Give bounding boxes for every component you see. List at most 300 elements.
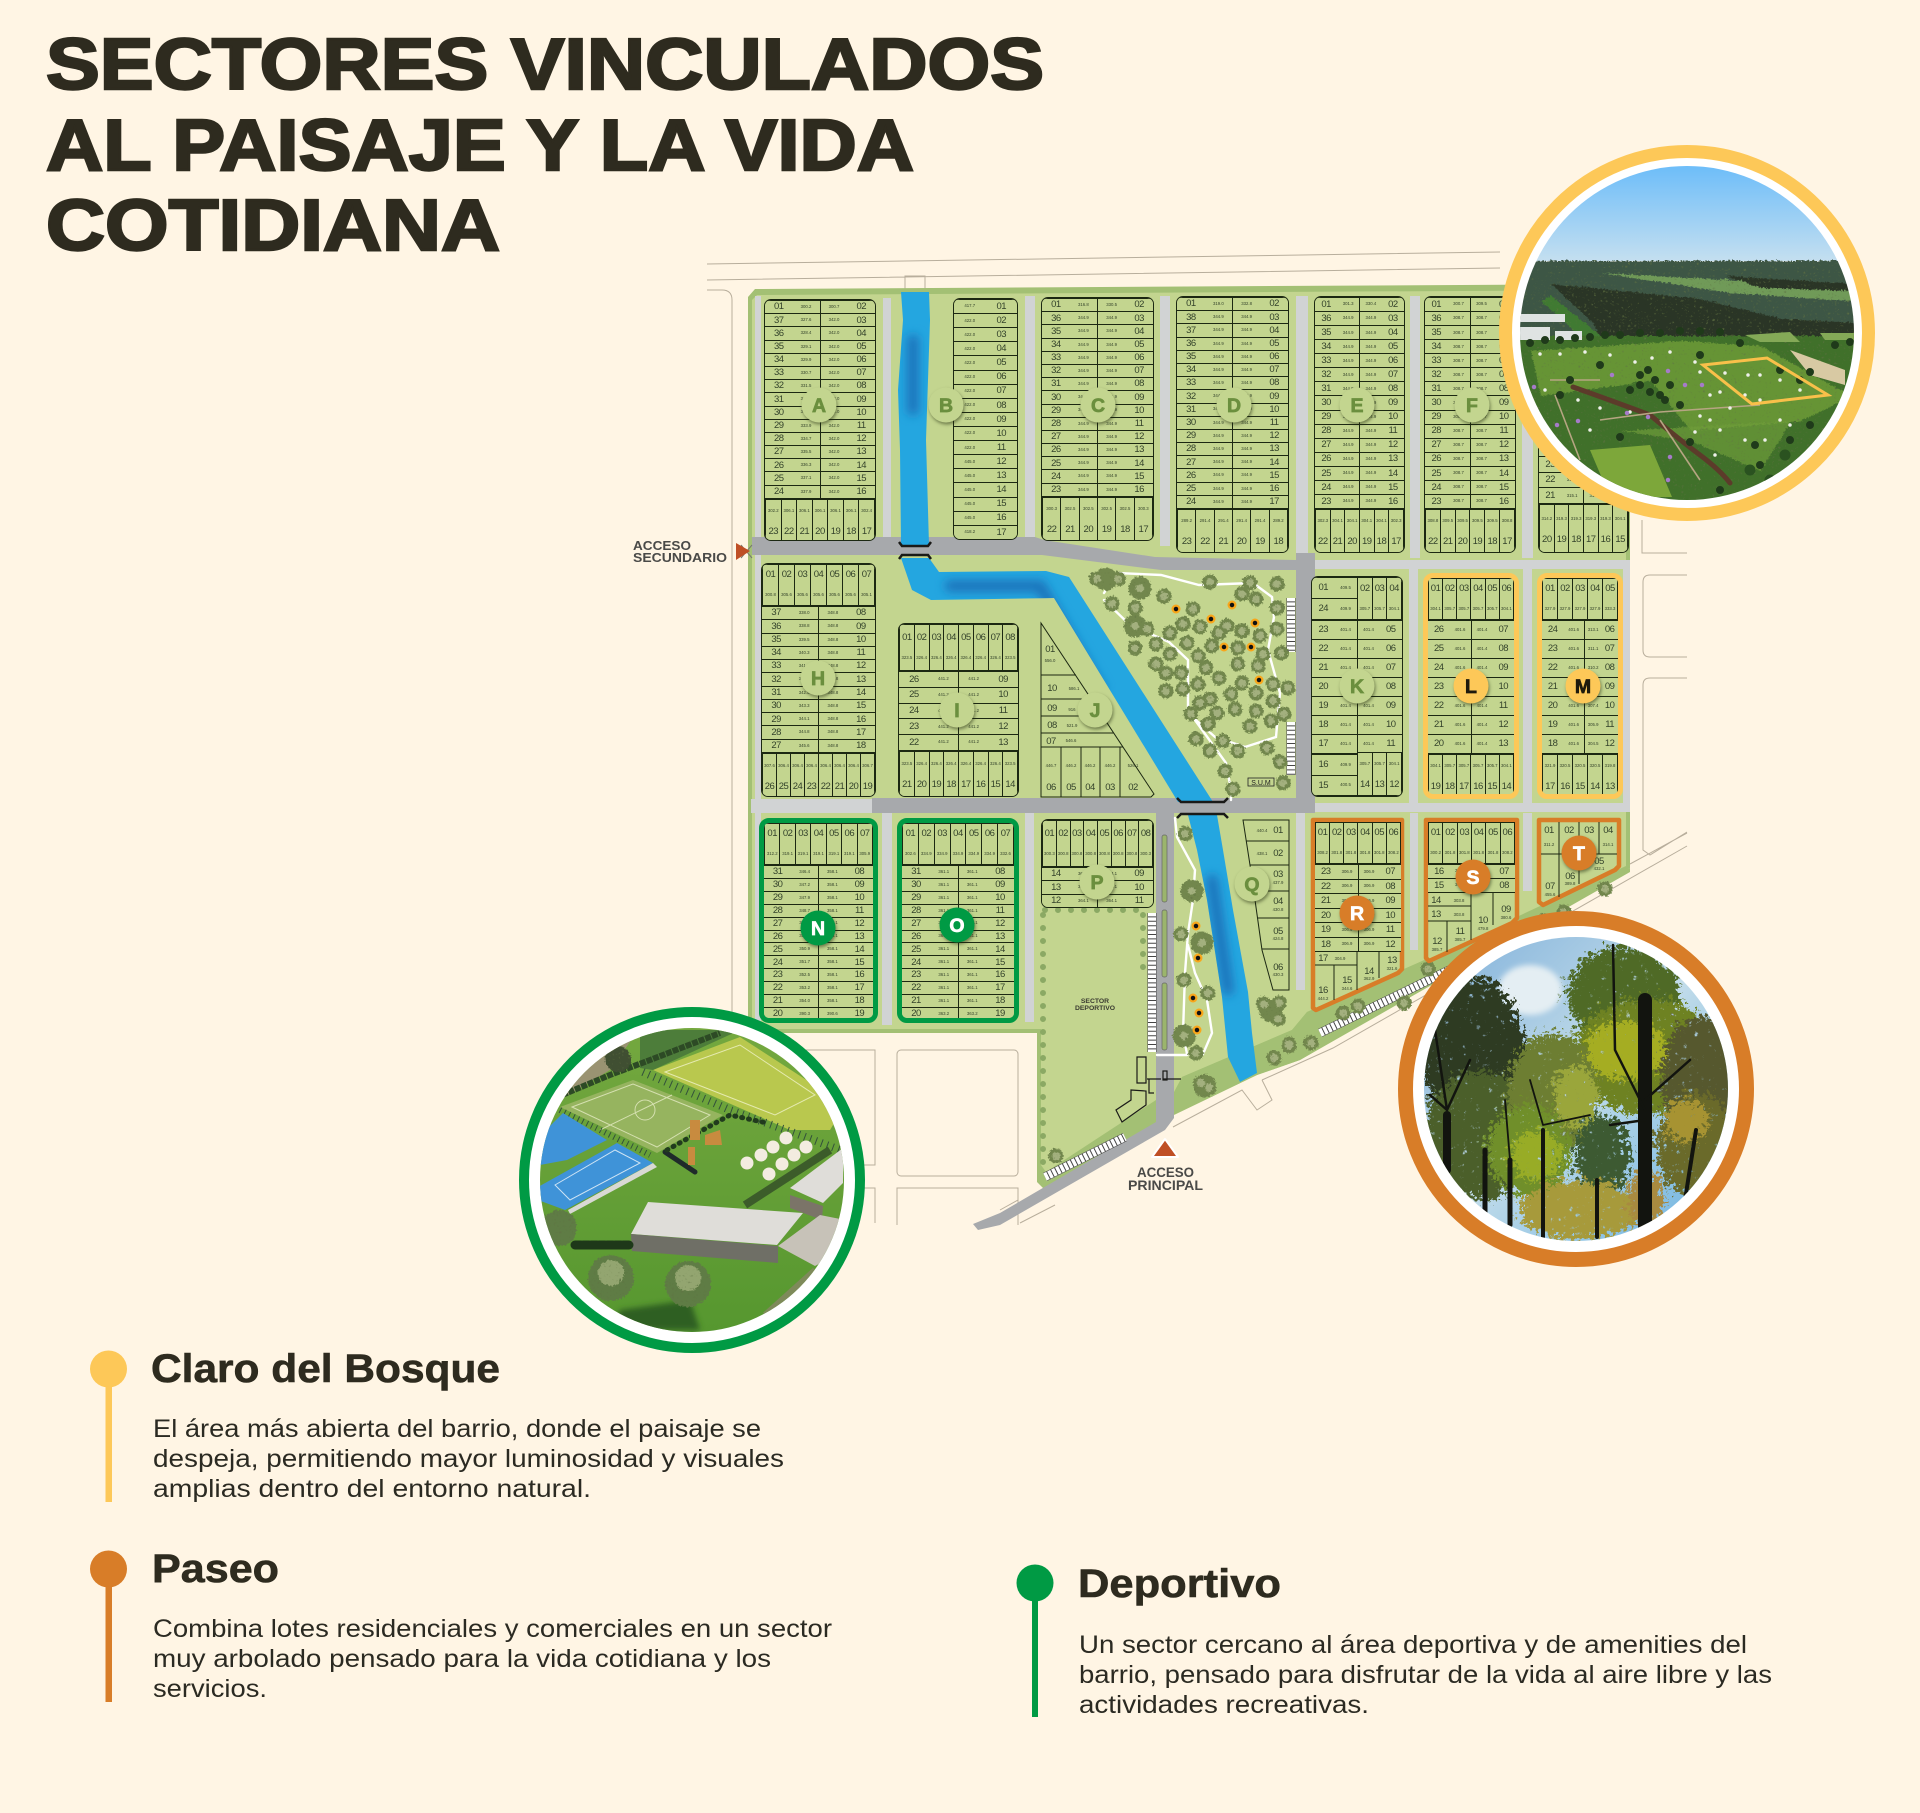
sector O: Deportivo lots: 25: [911, 944, 921, 955]
block B lots: 12: [996, 456, 1006, 467]
sector M: Claro del Bosque lots: 04: [1590, 583, 1600, 594]
block F lots: 308.8: [1502, 518, 1512, 523]
icon: green pin: [1016, 1564, 1054, 1717]
block H lots: 338.8: [799, 623, 810, 628]
block I lots: 02: [917, 632, 926, 642]
sector N: Deportivo lots: 350.9: [799, 946, 810, 951]
sector M: Claro del Bosque lots: 11: [1605, 719, 1614, 730]
block J lots: 08: [1047, 720, 1057, 731]
block A lots: 331.5: [801, 383, 811, 388]
block A lots: 05: [856, 341, 866, 352]
park lawn paths and hedges: [1043, 573, 1280, 1167]
sector N: Deportivo lots: 358.1: [827, 972, 838, 977]
block C lots: 35: [1051, 326, 1061, 337]
sector badges: I: [954, 700, 960, 722]
sector O: Deportivo lots: 27: [911, 918, 921, 929]
block K lots: 305.7: [1359, 606, 1370, 610]
block H lots: 306.4: [820, 763, 831, 768]
sector O: Deportivo lots: 01: [906, 828, 915, 839]
sector M: Claro del Bosque lots: 15: [1575, 781, 1585, 792]
block G lots: 12: [1612, 490, 1622, 501]
sector N: Deportivo lots: 312.2: [767, 851, 778, 856]
block E lots: 15: [1388, 482, 1398, 493]
block F lots: 308.7: [1476, 456, 1487, 461]
block D lots: 36: [1186, 338, 1196, 349]
sector N: Deportivo lots: 349.5: [799, 920, 810, 925]
block J lots: 04: [1085, 782, 1095, 793]
block G lots: 14: [1612, 459, 1622, 470]
block K lots: 20: [1318, 681, 1328, 692]
photo: sports amenities, green ring: [524, 1012, 860, 1348]
block H lots: 04: [814, 569, 823, 580]
block H lots: 15: [856, 700, 866, 711]
block E lots: 29: [1321, 411, 1331, 422]
block A lots: 333.9: [801, 423, 811, 428]
block D lots: 07: [1269, 364, 1279, 375]
block D lots: 344.9: [1213, 420, 1224, 425]
sector O: Deportivo lots: 13: [995, 931, 1005, 942]
block F lots: 300.7: [1453, 301, 1464, 306]
block I lots: 25: [909, 689, 919, 700]
block A lots: 02: [856, 301, 866, 312]
sector L: Claro del Bosque lots: 305.7: [1473, 763, 1483, 768]
block H lots: 17: [856, 727, 866, 738]
block Q lots: 02: [1273, 848, 1283, 859]
block F lots: 34: [1431, 341, 1441, 352]
block K lots: 409.5: [1340, 585, 1351, 590]
block C lots: 32: [1051, 365, 1061, 376]
block F lots: 308.7: [1453, 315, 1464, 320]
block D lots: 05: [1269, 338, 1279, 349]
icon: yellow pin: [90, 1350, 127, 1502]
block G lots: 319.3: [1585, 516, 1596, 520]
block A lots: 11: [857, 420, 866, 431]
block C lots: 34: [1051, 339, 1061, 350]
S.U.M building: S.U.M: [1251, 780, 1271, 787]
sector O: Deportivo lots: 361.1: [938, 869, 949, 874]
block I lots: 326.4: [916, 654, 927, 660]
sector L: Claro del Bosque lots: 25: [1434, 643, 1444, 654]
sector L: Claro del Bosque lots: 08: [1498, 643, 1508, 654]
sector R upper lots: 306.9: [1342, 869, 1352, 874]
sector O: Deportivo lots: 11: [996, 905, 1004, 916]
block K lots: 409.9: [1340, 606, 1351, 611]
block F lots: 32: [1431, 369, 1441, 380]
block E lots: 344.9: [1365, 484, 1376, 489]
block C lots: 04: [1134, 326, 1144, 337]
block H lots: 348.8: [827, 623, 838, 628]
block C lots: 302.5: [1120, 506, 1130, 511]
block D lots: 289.2: [1273, 518, 1284, 523]
block F lots: 29: [1431, 411, 1441, 422]
block H lots: 25: [779, 781, 788, 792]
block F lots: 308.8: [1428, 518, 1438, 523]
block H lots: 305.6: [797, 592, 808, 597]
sector S upper lots: 03: [1460, 827, 1469, 838]
block H lots: 348.8: [827, 743, 838, 748]
block D lots: 344.9: [1241, 446, 1252, 451]
block F lots: 22: [1428, 536, 1438, 547]
block C lots: 344.9: [1078, 460, 1089, 465]
block A lots: 342.0: [829, 330, 839, 335]
block D lots: 26: [1186, 470, 1196, 481]
sector N: Deportivo lots: 16: [855, 969, 864, 980]
sector L: Claro del Bosque lots: 401.4: [1477, 703, 1487, 708]
sector M: Claro del Bosque lots: 06: [1605, 624, 1614, 635]
block A lots: 25: [774, 473, 784, 484]
block F lots: 02: [1499, 299, 1509, 310]
block C lots: 302.5: [1065, 506, 1075, 511]
legend: Paseo: servicios.: [153, 1675, 267, 1703]
block D lots: 30: [1186, 417, 1196, 428]
block A lots: 17: [862, 526, 871, 537]
block B lots: 417.7: [964, 303, 975, 308]
sector R upper lots: 09: [1385, 895, 1395, 906]
block G lots: 22: [1545, 474, 1555, 485]
sector M: Claro del Bosque lots: 12: [1605, 738, 1614, 749]
sector L: Claro del Bosque lots: 20: [1434, 738, 1444, 749]
sector M: Claro del Bosque lots: 327.9: [1545, 606, 1555, 611]
block K lots: 305.7: [1374, 761, 1385, 766]
block A lots: 342.0: [829, 396, 839, 401]
block I lots: 26: [909, 674, 919, 685]
block P lots: 364.1: [1106, 871, 1117, 876]
block B lots: 422.0: [964, 374, 975, 379]
sector M: Claro del Bosque lots: 23: [1548, 643, 1557, 654]
sector L: Claro del Bosque lots: 305.7: [1444, 606, 1455, 611]
block E lots: 08: [1388, 383, 1398, 394]
block F lots: 308.7: [1453, 470, 1464, 475]
sector N: Deportivo lots: 348.7: [799, 908, 810, 913]
block B lots: 445.0: [964, 459, 975, 464]
sector O: Deportivo lots: 361.1: [967, 895, 978, 900]
sector N: Deportivo lots: 12: [855, 918, 864, 929]
block I lots: 20: [917, 779, 926, 790]
block A lots: 01: [774, 301, 784, 312]
block B lots: 445.0: [964, 501, 975, 506]
sector M: Claro del Bosque lots: 401.6: [1568, 627, 1579, 632]
block Q lots: 437.9: [1273, 880, 1284, 885]
block I lots: 17: [961, 779, 971, 790]
sector O: Deportivo lots: 361.1: [967, 920, 978, 925]
block I lots: 19: [932, 779, 941, 790]
block I lots: 326.4: [960, 761, 971, 766]
block D lots: 38: [1186, 312, 1196, 323]
block G lots: 315.1: [1589, 461, 1600, 466]
sector O: Deportivo lots: 334.9: [921, 851, 932, 856]
sector R outline and lower lots: 362.9: [1364, 976, 1375, 981]
sector L: Claro del Bosque lots: 304.1: [1501, 763, 1512, 768]
block B lots: 08: [996, 400, 1006, 411]
block D lots: 344.9: [1213, 459, 1224, 464]
block F lots: 308.7: [1453, 344, 1464, 349]
block F lots: 09: [1499, 397, 1509, 408]
block A lots: 16: [856, 486, 866, 497]
block E lots: 344.9: [1365, 456, 1376, 461]
block H lots: 34: [771, 647, 781, 658]
sector N: Deportivo lots: 358.1: [827, 869, 838, 874]
sector L: Claro del Bosque lots: 304.1: [1430, 763, 1441, 768]
S.U.M building: [1248, 778, 1274, 787]
surrounding parcel outlines: [707, 252, 1687, 1225]
sector S upper lots: 301.8: [1445, 850, 1455, 855]
sector badges: J: [1090, 700, 1100, 722]
sector N: Deportivo lots: 358.1: [827, 959, 838, 964]
sector O: Deportivo lots: 24: [911, 957, 921, 968]
block D lots: 21: [1219, 536, 1228, 547]
block B lots: 418.2: [964, 529, 975, 534]
block F lots: 308.7: [1453, 498, 1464, 503]
block B lots: 06: [996, 371, 1006, 382]
sector M: Claro del Bosque lots: 24: [1548, 624, 1557, 635]
legend: Claro del Bosque: Claro del Bosque: [151, 1347, 500, 1391]
block P lots: 08: [1141, 828, 1150, 838]
sector N: Deportivo lots: 358.1: [827, 882, 838, 887]
block P lots: 300.8: [1113, 850, 1124, 856]
block G lots: 304.1: [1615, 516, 1626, 520]
block E lots: 344.9: [1365, 330, 1376, 334]
block H lots: 339.5: [799, 637, 810, 642]
block C lots: 344.9: [1106, 355, 1117, 360]
block F lots: 308.7: [1453, 442, 1464, 447]
block A lots: 342.0: [829, 462, 839, 467]
sector M: Claro del Bosque lots: 401.6: [1568, 684, 1579, 689]
block E lots: 16: [1388, 496, 1398, 507]
legend: Deportivo: barrio, pensado para disfrutar de la vida al aire libre y las: [1079, 1661, 1772, 1689]
sector T outline and lots: 314.1: [1603, 842, 1614, 847]
main roads: [752, 537, 1315, 1230]
sector L: Claro del Bosque lots: 401.6: [1455, 665, 1465, 670]
block C lots: 13: [1134, 444, 1144, 455]
sector L: Claro del Bosque lots: 02: [1445, 583, 1455, 594]
sector S upper lots: 06: [1503, 827, 1512, 838]
block E lots: 35: [1321, 327, 1331, 338]
block J lots: 07: [1046, 736, 1056, 747]
block E lots: 19: [1362, 536, 1372, 547]
block B lots: 445.0: [964, 515, 975, 520]
block D lots: 344.9: [1213, 472, 1224, 477]
sector L: Claro del Bosque lots: 13: [1498, 738, 1508, 749]
block B lots: 13: [996, 470, 1006, 481]
block J lots: 06: [1046, 782, 1056, 793]
sector S outline and lower lots: 380.6: [1501, 915, 1512, 920]
block I lots: 441.2: [938, 724, 949, 729]
sector R upper lots: 306.9: [1342, 912, 1352, 917]
block I lots: 326.4: [946, 761, 956, 766]
sector S outline and lower lots: [1426, 820, 1517, 961]
block D lots: 344.9: [1241, 406, 1252, 411]
block F lots: 309.5: [1476, 301, 1487, 306]
block G lots: 21: [1545, 490, 1555, 501]
block H lots: 341.0: [799, 663, 810, 668]
sector O: Deportivo lots: 17: [995, 982, 1005, 993]
block F lots: 309.5: [1442, 518, 1453, 523]
sector R upper lots: 301.8: [1360, 850, 1370, 855]
sector M: Claro del Bosque lots: 311.1: [1588, 646, 1598, 651]
sector N: Deportivo lots: 06: [845, 828, 854, 839]
block F lots: 03: [1499, 313, 1509, 324]
block H lots: 348.8: [827, 663, 838, 668]
sector badges: L: [1465, 676, 1477, 698]
block I lots: 06: [976, 632, 985, 642]
block F lots: 308.7: [1476, 498, 1487, 503]
sector O: Deportivo lots: 16: [995, 969, 1005, 980]
block F lots: 20: [1458, 536, 1467, 547]
block C lots: 26: [1051, 444, 1061, 455]
sector N: Deportivo lots: 23: [773, 969, 782, 980]
block Q lots: 430.8: [1273, 907, 1284, 912]
block H lots: 19: [863, 781, 872, 792]
block D lots: 01: [1186, 298, 1196, 309]
block P lots: 364.1: [1078, 884, 1089, 889]
sector O: Deportivo lots: 361.1: [938, 895, 949, 900]
block C lots: 06: [1134, 352, 1144, 363]
block F lots: 01: [1431, 299, 1441, 310]
block D lots: 09: [1269, 391, 1279, 402]
sector R upper lots: 306.9: [1342, 927, 1352, 932]
sector O: Deportivo lots: 332.6: [1000, 851, 1011, 856]
sector S upper lots: 301.8: [1459, 850, 1470, 855]
sector L: Claro del Bosque lots: 04: [1473, 583, 1483, 594]
block F lots: 308.7: [1476, 386, 1487, 391]
block D lots: 28: [1186, 443, 1196, 454]
block C lots: 302.5: [1101, 506, 1112, 511]
block J lots: 526.1: [1128, 763, 1139, 768]
sector M: Claro del Bosque lots: 20: [1548, 700, 1557, 711]
block A lots: 21: [800, 526, 809, 537]
sector S outline and lower lots: 479.8: [1478, 926, 1489, 931]
block C lots: 344.9: [1106, 342, 1117, 346]
sector L: Claro del Bosque lots: 305.7: [1487, 763, 1498, 768]
block D lots: 344.9: [1241, 472, 1252, 477]
block K lots: 401.4: [1340, 722, 1351, 727]
block F lots: 308.7: [1476, 442, 1487, 447]
block K lots: [1311, 576, 1403, 797]
block F lots: [1424, 296, 1516, 553]
block B lots: 422.0: [964, 444, 975, 450]
block F lots: 308.7: [1476, 470, 1487, 475]
block A lots: 04: [856, 328, 866, 339]
block D lots: 344.9: [1241, 340, 1252, 346]
block F lots: 12: [1499, 439, 1509, 450]
block A lots: [764, 299, 876, 541]
block I lots: 326.4: [931, 761, 942, 766]
block E lots: 344.9: [1365, 442, 1376, 447]
block G lots: 319.3: [1571, 516, 1582, 520]
block D lots: 344.9: [1241, 499, 1252, 504]
block A lots: 15: [856, 473, 866, 484]
block K lots: 401.4: [1340, 646, 1351, 651]
sector N: Deportivo lots: 29: [773, 892, 782, 903]
block I lots: 441.2: [968, 676, 979, 681]
block C lots: 36: [1051, 313, 1061, 324]
block B lots: 09: [996, 414, 1006, 425]
block P lots: 300.8: [1126, 850, 1137, 856]
sector T outline and lots: 01: [1544, 825, 1554, 836]
block E lots: 344.9: [1365, 386, 1376, 391]
block I lots: 23: [909, 721, 919, 732]
sector R outline and lower lots: 15: [1342, 975, 1352, 986]
sector M: Claro del Bosque lots: 17: [1545, 781, 1555, 792]
sector M: Claro del Bosque lots: 401.6: [1568, 741, 1579, 746]
sector L: Claro del Bosque lots: 14: [1502, 781, 1511, 792]
sector M: Claro del Bosque lots: 309.1: [1588, 684, 1599, 689]
sector O: Deportivo lots: 361.1: [967, 946, 978, 951]
sector T outline and lots: 311.2: [1544, 842, 1555, 847]
block F lots: 05: [1499, 341, 1509, 352]
block A lots: 306.1: [846, 508, 856, 513]
block I lots: 03: [932, 632, 941, 642]
block I lots: 13: [998, 737, 1008, 748]
block K lots: 11: [1386, 738, 1395, 749]
block C lots: 14: [1134, 458, 1144, 469]
sector badges: T: [1573, 843, 1585, 865]
sector badges: R: [1350, 903, 1364, 925]
title: AL PAISAJE Y LA VIDA: [46, 106, 914, 186]
sector S upper lots: [1428, 822, 1515, 893]
sector N: Deportivo lots: 05: [829, 828, 839, 839]
sector L: Claro del Bosque lots: 03: [1459, 583, 1469, 594]
sector S outline and lower lots: 385.7: [1432, 947, 1443, 952]
block B lots: 05: [996, 357, 1006, 368]
block E lots: 02: [1388, 299, 1398, 310]
block F lots: 16: [1499, 496, 1509, 507]
block H lots: 305.6: [781, 592, 792, 597]
sector N: Deportivo lots: 21: [773, 995, 782, 1006]
block C lots: 344.9: [1106, 487, 1117, 492]
block I lots: 12: [998, 721, 1008, 732]
sector R upper lots: 306.9: [1342, 883, 1352, 888]
sector L: Claro del Bosque lots: 305.7: [1473, 606, 1483, 611]
block C lots: [1041, 297, 1154, 541]
sector R upper lots: 306.9: [1342, 941, 1352, 946]
legend: Claro del Bosque: amplias dentro del entorno natural.: [153, 1475, 591, 1503]
sector deportivo label: [1075, 998, 1115, 1012]
sector R outline and lower lots: 321.6: [1387, 966, 1398, 971]
block A lots: 329.1: [801, 344, 811, 348]
sector N: Deportivo lots: 18: [855, 995, 864, 1006]
block C lots: 25: [1051, 458, 1061, 469]
sector badges: D: [1227, 395, 1241, 417]
block A lots: 342.0: [829, 489, 839, 494]
block D lots: 344.9: [1241, 367, 1252, 372]
block G lots: 315.1: [1589, 477, 1600, 482]
block A lots: 342.0: [829, 436, 839, 441]
block K lots: 401.4: [1363, 722, 1374, 727]
block F lots: 308.7: [1453, 372, 1464, 377]
sector badges: A: [812, 395, 826, 417]
block C lots: 330.5: [1106, 302, 1117, 307]
block H lots: 20: [849, 781, 858, 792]
block D lots: 29: [1186, 430, 1196, 441]
block A lots: 08: [856, 380, 866, 391]
block D lots: [1176, 296, 1289, 553]
block D lots: 16: [1269, 483, 1279, 494]
label: acceso secundario: [633, 538, 752, 565]
sector S outline and lower lots: 10: [1478, 915, 1488, 926]
block E lots: 344.9: [1343, 344, 1354, 349]
sector M: Claro del Bosque lots: 333.3: [1605, 606, 1615, 611]
sector deportivo label: DEPORTIVO: [1075, 1005, 1115, 1012]
block C lots: 344.9: [1078, 394, 1089, 399]
sector L: Claro del Bosque lots: 22: [1434, 700, 1444, 711]
sector N: Deportivo lots: 31: [773, 866, 782, 877]
block A lots: 328.4: [801, 330, 811, 335]
sector M: Claro del Bosque lots: 320.5: [1590, 763, 1600, 768]
block C lots: 344.9: [1078, 381, 1089, 386]
block F lots: 15: [1499, 482, 1509, 493]
block H lots: 348.8: [827, 729, 838, 734]
